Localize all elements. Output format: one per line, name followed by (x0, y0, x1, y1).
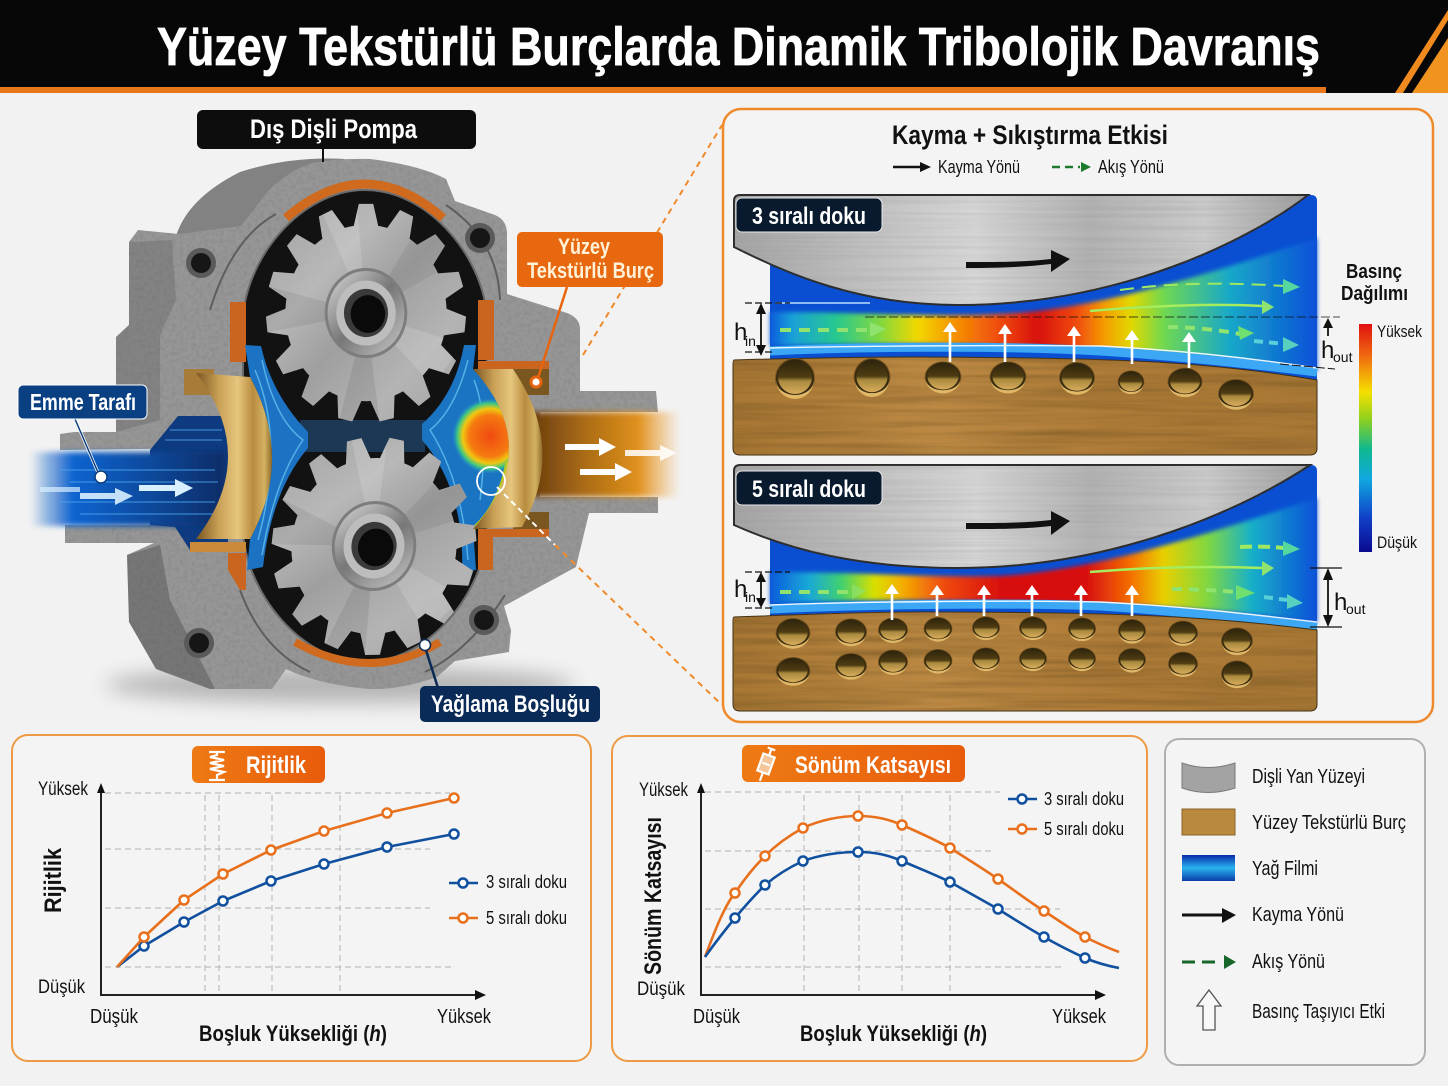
gap height inlet 5-row: h (734, 576, 747, 603)
badge: stiffness (192, 746, 325, 783)
legend: sliding direction: Kayma Yönü (1252, 904, 1344, 926)
stiffness axes (97, 783, 486, 1000)
sliding arrow 3-row (966, 250, 1070, 272)
stiffness legend: 5 sıralı doku (486, 908, 567, 928)
gap height outlet 3-row (865, 317, 1353, 369)
panel key: flow direction: Akış Yönü (1098, 157, 1164, 177)
right oil film and pressure hot spot (422, 345, 509, 570)
damping legend: 5 sıralı doku (1044, 819, 1124, 839)
icon: spring (209, 752, 225, 780)
legend: gear side surface: Dişli Yan Yüzeyi (1252, 766, 1365, 788)
panel: damping coefficient chart (612, 736, 1147, 1061)
detail selection circle (477, 467, 505, 495)
pressure distribution scale: Dağılımı (1341, 283, 1408, 305)
badge 3-row: 3 sıralı doku (752, 203, 866, 230)
badge 3-row (736, 198, 882, 232)
damping axis labels: Düşük (693, 1006, 741, 1028)
label: textured bushing (517, 232, 663, 387)
badge: damping: Sönüm Katsayısı (795, 752, 951, 779)
panel key: sliding direction (893, 157, 1020, 177)
legend: pressure load effect (1197, 990, 1385, 1030)
label: textured bushing: Yüzey (558, 234, 611, 259)
damping axis labels: Yüksek (1052, 1006, 1107, 1028)
flow arrows 5-row (780, 541, 1303, 609)
textured bushing 5-row (733, 612, 1317, 711)
outlet port oil flow (530, 412, 680, 497)
badge 5-row (736, 471, 882, 505)
badge 5-row: 5 sıralı doku (752, 476, 866, 503)
label: external gear pump (197, 110, 476, 162)
stiffness legend: 3 sıralı doku (486, 872, 567, 892)
upper gear (260, 198, 468, 428)
damping legend (1008, 789, 1124, 839)
pump housing front (60, 159, 658, 689)
gap height inlet 3-row (734, 303, 790, 356)
stiffness series: 3-row (117, 830, 458, 967)
meshing zone (300, 420, 425, 452)
callout lines to detail panel (497, 125, 722, 705)
badge: stiffness: Rijitlik (246, 752, 307, 779)
texture holes 5-row (776, 616, 1253, 688)
textured bushing 3-row (733, 357, 1317, 455)
label: suction side (18, 385, 147, 483)
header band (0, 0, 1448, 93)
stiffness axis labels: Düşük (38, 977, 85, 998)
pressure distribution scale: Basınç (1346, 261, 1402, 283)
oil film 3-row (770, 195, 1317, 380)
gap height inlet 5-row: in (745, 589, 756, 605)
label: textured bushing: Tekstürlü Burç (527, 258, 654, 283)
panel heading: Kayma + Sıkıştırma Etkisi (892, 120, 1168, 150)
gear surface 5-row (734, 465, 1310, 568)
damping axis labels: Sönüm Katsayısı (640, 817, 667, 975)
right textured bushing (473, 369, 542, 529)
damping axis labels: Düşük (637, 979, 685, 1000)
legend: textured bushing (1182, 809, 1406, 835)
stiffness axis labels: Yüksek (437, 1006, 492, 1028)
gap height inlet 3-row: h (734, 319, 747, 346)
legend: flow direction: Akış Yönü (1252, 951, 1325, 973)
legend: pressure load effect: Basınç Taşıyıcı Etki (1252, 1001, 1385, 1023)
gap height outlet 5-row: h (1334, 589, 1347, 616)
bolt holes (184, 223, 499, 658)
legend: flow direction (1182, 951, 1325, 973)
pressure distribution scale (1341, 261, 1422, 552)
stiffness axis labels: Yüksek (38, 779, 88, 800)
pressure distribution scale: Düşük (1377, 533, 1417, 552)
damping series: 5-row (705, 812, 1119, 957)
detail: 3-row texture (733, 195, 1353, 455)
gap height outlet 5-row: out (1346, 601, 1366, 617)
gap height outlet 3-row: out (1333, 349, 1353, 365)
legend: oil film: Yağ Filmi (1252, 858, 1318, 880)
damping axes (697, 783, 1106, 1000)
damping axis labels: Boşluk Yüksekliği (h) (800, 1021, 987, 1046)
label: suction side: Emme Tarafı (30, 389, 136, 415)
oil film 5-row (770, 465, 1317, 632)
gap height outlet 5-row (1310, 568, 1366, 627)
stiffness axis labels: Boşluk Yüksekliği (h) (199, 1021, 387, 1046)
label: external gear pump: Dış Dişli Pompa (250, 114, 418, 144)
gear chamber (243, 190, 487, 662)
gap height outlet 3-row: h (1321, 337, 1334, 364)
left oil film (245, 345, 308, 570)
stiffness axis labels: Rijitlik (40, 847, 67, 913)
lower gear (245, 411, 500, 681)
badge: damping (742, 745, 965, 783)
stiffness axis labels: Düşük (90, 1006, 139, 1028)
stiffness grid (105, 793, 452, 995)
panel: legend (1165, 739, 1425, 1065)
gap height inlet 3-row: in (745, 333, 756, 349)
label: lubrication gap (420, 640, 600, 722)
inlet port oil flow (30, 416, 228, 550)
damping axis labels (637, 780, 1107, 1046)
inlet flow arrows (40, 479, 193, 505)
left textured bushing (184, 369, 272, 552)
panel key: sliding direction: Kayma Yönü (938, 157, 1020, 177)
stiffness legend (449, 872, 567, 928)
panel: stiffness chart (12, 735, 591, 1061)
pressure arrows 3-row (943, 322, 1196, 368)
damping legend: 3 sıralı doku (1044, 789, 1124, 809)
flow arrows 3-row (780, 279, 1300, 352)
damping grid (705, 792, 1065, 995)
gear surface 3-row (734, 195, 1308, 305)
label: lubrication gap: Yağlama Boşluğu (431, 691, 590, 718)
pump cross-section illustration (30, 159, 680, 703)
damping axis labels: Yüksek (639, 780, 688, 801)
pump housing rear extrusion (176, 159, 345, 236)
panel key: flow direction (1052, 157, 1164, 177)
legend: sliding direction (1182, 904, 1344, 926)
orange sleeve pads (228, 184, 549, 663)
damping series: 3-row (705, 848, 1119, 968)
pressure distribution scale: Yüksek (1377, 322, 1422, 341)
outlet flow arrows (565, 438, 677, 481)
legend: textured bushing: Yüzey Tekstürlü Burç (1252, 812, 1406, 834)
detail: 5-row texture (733, 465, 1366, 711)
sliding arrow 5-row (966, 511, 1070, 535)
stiffness series: 5-row (117, 794, 458, 967)
legend: gear side surface (1182, 763, 1365, 792)
texture holes 3-row (775, 358, 1254, 410)
gap height inlet 5-row (734, 572, 790, 608)
pressure arrows 5-row (885, 584, 1139, 620)
icon: damper (754, 747, 777, 783)
stiffness axis labels (38, 779, 492, 1046)
panel: shear and squeeze effect (723, 109, 1433, 722)
legend: oil film (1182, 855, 1318, 881)
